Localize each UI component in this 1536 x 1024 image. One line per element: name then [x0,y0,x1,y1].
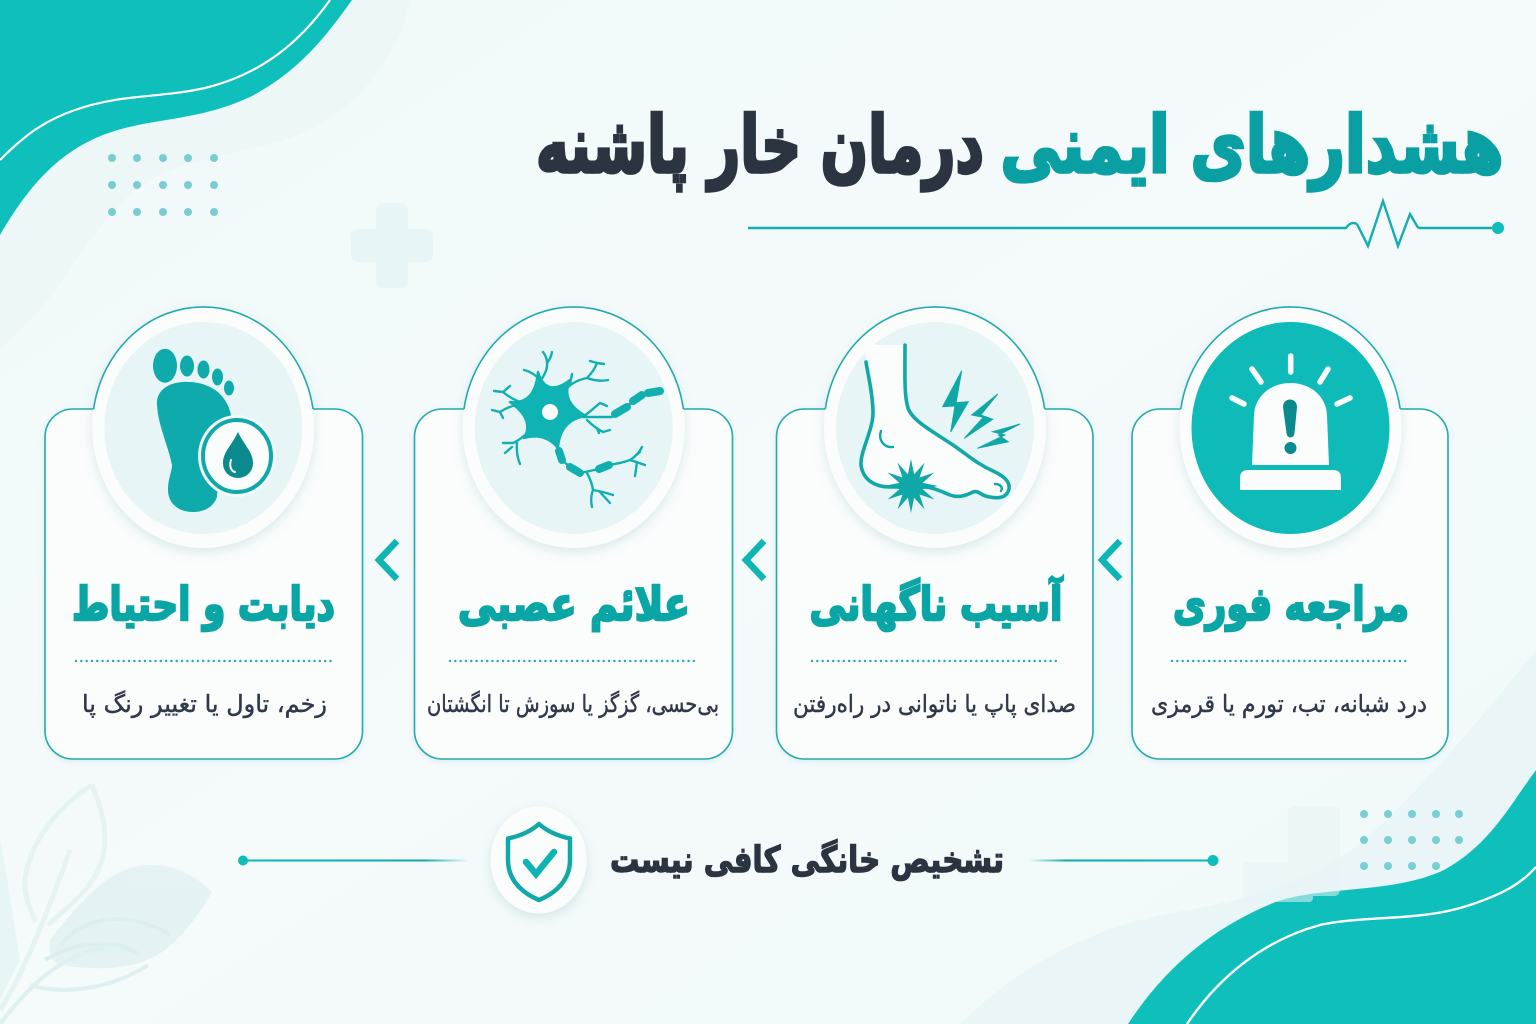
circle badge [824,307,1046,548]
title underline with heartbeat [748,201,1504,246]
card frame [45,409,362,759]
icon: neuron [492,352,660,507]
arrow [1102,541,1120,579]
circle badge [463,307,685,548]
panel: immediate care [1132,307,1448,759]
decorative leaves: bottom left [0,785,212,1024]
card frame [414,409,732,759]
card heading: دیابت و احتیاط [72,577,335,631]
circle badge [92,307,314,548]
icon: alarm siren [1192,322,1390,534]
card frame [776,409,1093,759]
circle badge [1180,307,1402,548]
card heading: آسیب ناگهانی [810,576,1063,631]
footer left line [238,856,469,866]
footer statement: تشخیص خانگی کافی نیست [610,839,1004,881]
footer right line [1029,855,1218,866]
dot grid: bottom right [1360,810,1463,870]
decorative wave: bottom right [960,650,1536,1024]
card description: درد شبانه، تب، تورم یا قرمزی [1151,690,1427,718]
panel: diabetes caution [45,307,362,759]
card description: زخم، تاول یا تغییر رنگ پا [82,690,327,718]
card description: بی‌حسی، گزگز یا سوزش تا انگشتان [427,690,719,718]
card description: صدای پاپ یا ناتوانی در راه‌رفتن [793,690,1076,718]
decorative plus: top [351,203,433,288]
panel: nerve symptoms [414,307,732,759]
arrow [746,541,764,579]
decorative plus: bottom [1243,806,1340,902]
card frame [1132,409,1448,759]
icon: shield with check [491,806,587,914]
decorative wave: top left [0,0,410,350]
card heading: علائم عصبی [458,577,690,631]
card heading: مراجعه فوری [1173,577,1409,631]
icon: foot with drop [153,349,276,512]
arrow [379,541,397,579]
title [536,101,1504,191]
title: dark part: درمان خار پاشنه [536,101,984,191]
dot grid: top left [108,154,218,216]
icon: injured foot [861,345,1020,513]
panel: sudden injury [776,307,1093,759]
